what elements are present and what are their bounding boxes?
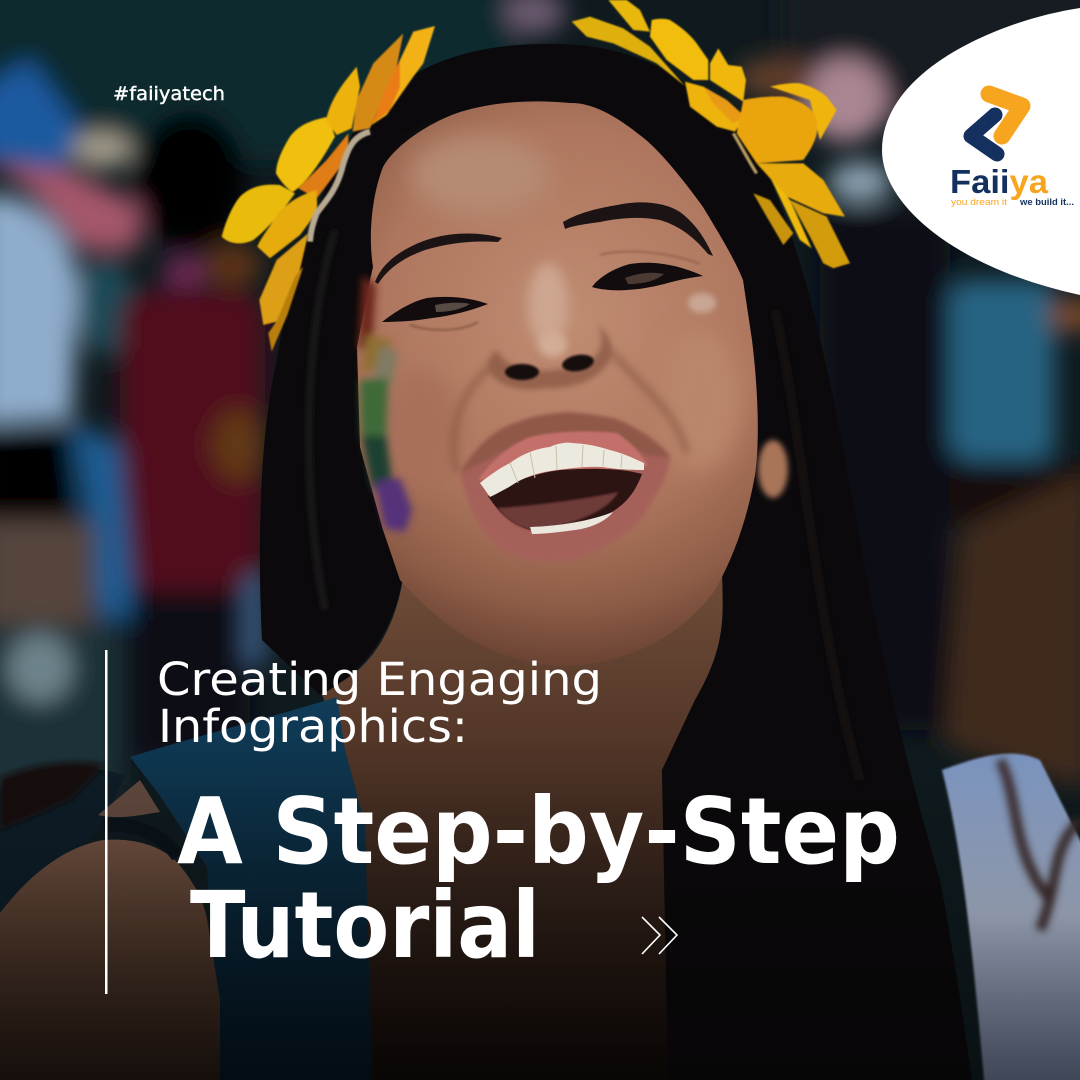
glitter on right cheek (688, 293, 716, 313)
flower crown left (222, 26, 435, 352)
ear (758, 440, 788, 498)
subtitle (157, 653, 602, 753)
subtitle: Infographics: (158, 700, 468, 753)
icon: double chevron arrow (642, 917, 677, 954)
nasolabial folds (453, 353, 687, 473)
white logo blob (882, 8, 1080, 295)
neck and chest (320, 560, 723, 1080)
logo tagline left: you dream it (951, 197, 1007, 208)
main title (177, 778, 900, 979)
flower crown right (572, 0, 850, 268)
white shirt at right with hair streaks (942, 754, 1080, 1080)
gum (478, 432, 648, 480)
eyebrows (375, 202, 713, 284)
left shoulder and arm (0, 762, 220, 1080)
nose (488, 263, 613, 389)
logo tagline right: we build it... (1019, 197, 1074, 208)
vest left (130, 697, 372, 1080)
lips (460, 413, 670, 562)
lower teeth (530, 512, 613, 534)
upper teeth (480, 443, 644, 497)
logo wordmark: Faiiya (950, 163, 1049, 200)
icon: navy chevron (971, 115, 997, 154)
logo: Faiiya (950, 94, 1074, 208)
eyes (382, 252, 703, 330)
hashtag: #faiiyatech (113, 83, 225, 105)
mouth (460, 413, 670, 562)
mouth interior (488, 469, 642, 530)
icon: orange chevron (989, 94, 1022, 136)
vertical rule (105, 650, 108, 994)
face (357, 101, 788, 666)
rainbow glitter on cheek (358, 275, 412, 532)
main title: Tutorial (190, 872, 540, 979)
subtitle: Creating Engaging (157, 653, 602, 706)
hair (260, 44, 972, 1080)
main title: A Step-by-Step (177, 778, 900, 885)
bottom dark overlay (0, 760, 1080, 1080)
